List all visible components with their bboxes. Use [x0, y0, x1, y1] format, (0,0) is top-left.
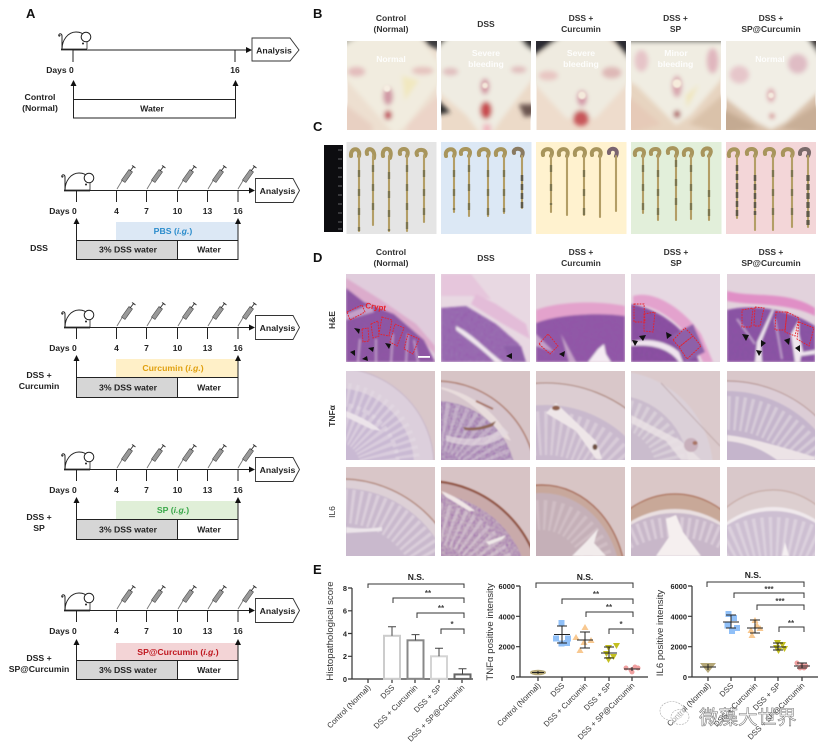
icon: mouse [62, 310, 94, 328]
day labels: 16 [233, 485, 243, 495]
analysis box: Analysis [260, 323, 296, 333]
TNFα image: DSS + SP@Curcumin [727, 371, 815, 460]
panel label B: B [313, 6, 322, 21]
significance brackets: ** [606, 603, 613, 612]
category labels: DSS [718, 681, 735, 699]
axes and ticks [343, 584, 473, 684]
category labels: DSS + Curcumin [372, 683, 419, 731]
watermark [660, 702, 797, 729]
day labels: 10 [173, 206, 182, 216]
axes and ticks: 6000 [499, 582, 515, 591]
analysis box [256, 458, 300, 482]
row label IL6: IL6 [327, 506, 337, 518]
photo caption: Normal [376, 54, 406, 64]
icon: wechat bubbles [660, 702, 689, 724]
icon: mouse [62, 452, 94, 470]
significance brackets: ** [425, 589, 432, 598]
day labels: 13 [203, 626, 212, 636]
analysis box: Analysis [256, 46, 292, 56]
day labels: 10 [173, 485, 182, 495]
day labels: 16 [233, 206, 243, 216]
group label: SP [33, 523, 45, 533]
significance brackets [368, 572, 464, 634]
treatment bar: PBS (i.g.) [154, 226, 192, 236]
significance brackets: N.S. [745, 570, 761, 580]
photo caption: curcumin bleeding: bleeding [563, 59, 599, 69]
treatment bar [116, 222, 238, 240]
water boxes: Water [197, 524, 222, 534]
category labels: DSS + SP [412, 683, 443, 714]
group label: DSS + [26, 370, 52, 380]
significance brackets: ** [788, 619, 795, 628]
day labels: Days 0 [49, 626, 77, 636]
analysis box [256, 598, 300, 622]
group label: SP@Curcumin [9, 664, 69, 674]
IL6 image: DSS [441, 467, 530, 556]
colon photo: DSS + Curcumin [536, 142, 626, 234]
column headings D [374, 247, 801, 268]
treatment bar: SP@Curcumin (i.g.) [137, 647, 219, 657]
water boxes: Water [197, 382, 222, 392]
day labels: 16 [230, 65, 240, 75]
category labels: DSS [549, 681, 566, 699]
water boxes: Water [197, 244, 222, 254]
syringes [117, 302, 256, 326]
photo caption: Severe [567, 48, 595, 58]
H&E image: control [346, 274, 435, 362]
icon: mouse [62, 173, 94, 190]
group label [22, 92, 58, 113]
significance brackets: *** [764, 585, 775, 594]
column headings D: DSS + [759, 247, 783, 257]
data points [700, 611, 810, 673]
group label [9, 653, 69, 674]
day labels: 7 [144, 206, 149, 216]
panel label D: D [313, 250, 322, 265]
column headings D: SP@Curcumin [741, 258, 801, 268]
axis arrow [76, 324, 255, 339]
analysis box [256, 178, 300, 202]
syringes [117, 586, 256, 609]
treatment bar: SP (i.g.) [157, 505, 189, 515]
category labels: DSS + SP@Curcumin [746, 681, 806, 742]
treatment bar [116, 643, 238, 660]
column headings D: DSS [477, 253, 495, 263]
bars [384, 627, 470, 679]
photo: DSS mouse [441, 41, 531, 130]
day labels [46, 65, 240, 75]
axes and ticks: 0 [343, 675, 347, 684]
colon photo: DSS + SP [631, 142, 722, 234]
day labels [49, 206, 243, 216]
category labels [665, 681, 806, 742]
chart: histopathological score [325, 572, 473, 744]
day labels: 4 [114, 343, 119, 353]
group label [19, 370, 59, 391]
H&E image: DSS + SP [631, 274, 720, 362]
group label: (Normal) [22, 103, 58, 113]
day labels: Days 0 [49, 343, 77, 353]
day labels: 7 [144, 485, 149, 495]
category labels: DSS + SP@Curcumin [406, 683, 466, 744]
analysis box: Analysis [260, 186, 296, 196]
axes and ticks [671, 582, 818, 682]
H&E image: DSS + SP@Curcumin [727, 274, 815, 362]
axis arrow [76, 188, 255, 202]
category labels: Control (Normal) [665, 681, 713, 728]
icon: mouse [59, 32, 91, 50]
IL6 image: DSS + Curcumin [536, 467, 625, 556]
analysis box: Analysis [260, 465, 296, 475]
day labels: 13 [203, 343, 212, 353]
ruler [324, 145, 343, 232]
photo caption: DSS bleeding: bleeding [468, 59, 504, 69]
significance brackets: *** [775, 597, 786, 606]
y axis title: TNFα positive intensity [485, 583, 496, 681]
axes and ticks: 0 [683, 673, 687, 682]
significance brackets: N.S. [577, 572, 593, 582]
syringes [117, 444, 256, 468]
column headings D: Curcumin [561, 258, 601, 268]
category labels: DSS + SP [582, 681, 613, 712]
axes and ticks: 2000 [499, 643, 515, 652]
column headings B: DSS [477, 19, 495, 29]
colon photo: DSS [441, 142, 532, 234]
water boxes: 3% DSS water [99, 244, 158, 254]
column headings D: DSS + [569, 247, 593, 257]
y axis title: IL6 positive intensity [655, 590, 666, 676]
row label TNFα: TNFα [327, 404, 337, 427]
category labels: DSS [379, 683, 396, 701]
day labels: 4 [114, 485, 119, 495]
column headings D: DSS + [664, 247, 688, 257]
y axis title: Histopathological score [325, 581, 336, 681]
axes and ticks: 6 [343, 606, 347, 616]
chart: TNFα positive intensity [485, 572, 648, 742]
analysis box [252, 38, 299, 61]
column headings B [374, 13, 801, 34]
day labels: Days 0 [46, 65, 74, 75]
watermark text: 微藻大世界 [699, 707, 797, 729]
day labels: 10 [173, 626, 182, 636]
H&E image: DSS + Curcumin [536, 274, 625, 362]
label: crypt: Crypt [365, 301, 387, 313]
panel label A: A [26, 6, 36, 21]
water boxes [74, 497, 241, 540]
axis arrow [76, 608, 255, 622]
category labels [495, 681, 636, 742]
panel label E: E [313, 562, 322, 577]
significance brackets: * [450, 620, 454, 629]
category labels: DSS + SP@Curcumin [576, 681, 636, 742]
day labels [49, 343, 243, 353]
water boxes: 3% DSS water [99, 382, 158, 392]
treatment bar [116, 359, 238, 377]
day labels [49, 485, 243, 495]
column headings B: Curcumin [561, 24, 601, 34]
photo caption: Minor [664, 48, 688, 58]
axes and ticks: 4000 [671, 612, 687, 621]
IL6 image: DSS + SP [631, 467, 720, 556]
day labels: 13 [203, 206, 212, 216]
colon photo: control [346, 142, 436, 234]
treatment bar [116, 501, 238, 519]
category labels: DSS + Curcumin [542, 681, 589, 729]
photo: control mouse [347, 41, 437, 130]
group label [26, 512, 52, 533]
IL6 image: control [346, 467, 435, 556]
photo caption: Severe [472, 48, 500, 58]
chart: IL6 positive intensity [655, 570, 818, 742]
photo caption: Normal [755, 54, 785, 64]
day labels: Days 0 [49, 485, 77, 495]
group label: DSS [30, 243, 48, 253]
water boxes [74, 639, 241, 680]
group label: DSS + [26, 512, 52, 522]
axes and ticks: 0 [511, 673, 515, 682]
day labels: 13 [203, 485, 212, 495]
water boxes [74, 218, 241, 260]
day labels: Days 0 [49, 206, 77, 216]
column headings D: Control [376, 247, 406, 257]
axes and ticks: 8 [343, 584, 347, 593]
column headings D: SP [670, 258, 682, 268]
photo: DSS + SP mouse [631, 41, 721, 130]
significance brackets [707, 570, 804, 632]
axis arrow [73, 47, 252, 62]
photo: DSS + Curcumin mouse [536, 41, 626, 130]
timeline: DSS group [30, 166, 300, 260]
column headings B: SP@Curcumin [741, 24, 801, 34]
scale bar [418, 356, 430, 358]
category labels: Control (Normal) [495, 681, 543, 728]
H&E image: DSS [441, 274, 530, 362]
TNFα image: control [346, 371, 435, 460]
axes and ticks [499, 582, 648, 682]
day labels: 7 [144, 626, 149, 636]
column headings B: DSS + [569, 13, 593, 23]
water box: Water [140, 104, 165, 114]
axes and ticks: 6000 [671, 582, 687, 591]
day labels: 16 [233, 343, 243, 353]
day labels: 7 [144, 343, 149, 353]
axes and ticks: 2000 [671, 643, 687, 652]
day labels: 4 [114, 626, 119, 636]
column headings B: Control [376, 13, 406, 23]
category labels [325, 683, 466, 744]
day labels: 10 [173, 343, 182, 353]
photo: DSS + SP@Curcumin mouse [726, 41, 816, 130]
treatment bar: Curcumin (i.g.) [142, 363, 204, 373]
syringes [117, 166, 256, 189]
group label: Curcumin [19, 381, 59, 391]
column headings B: SP [670, 24, 681, 34]
arrows [350, 328, 391, 361]
significance brackets [536, 572, 633, 634]
timeline: DSS + Curcumin group [19, 302, 300, 398]
colon photo: DSS + SP@Curcumin [726, 142, 816, 234]
day labels: 4 [114, 206, 119, 216]
water boxes [74, 355, 241, 398]
timeline: DSS + SP@Curcumin group [9, 586, 300, 680]
axes and ticks: 4 [343, 630, 348, 638]
row label H&E: H&E [327, 311, 337, 329]
panel label C: C [313, 119, 323, 134]
arrows [632, 332, 672, 346]
icon: mouse [62, 593, 94, 610]
category labels: Control (Normal) [325, 683, 373, 730]
column headings B: (Normal) [374, 24, 409, 34]
timeline: DSS + SP group [26, 444, 300, 540]
water boxes: Water [197, 665, 222, 675]
group label: Control [25, 92, 55, 102]
TNFα image: DSS + SP [631, 371, 720, 460]
category labels: DSS + Curcumin [712, 681, 759, 729]
TNFα image: DSS + Curcumin [536, 371, 625, 460]
significance brackets: * [619, 620, 623, 629]
day labels [49, 626, 243, 636]
axes and ticks: 4000 [499, 612, 515, 621]
analysis box [256, 316, 300, 340]
column headings B: DSS + [759, 13, 783, 23]
axis arrow [76, 466, 255, 481]
photo caption: SP bleeding: bleeding [658, 59, 693, 69]
analysis box: Analysis [260, 606, 296, 616]
water box [70, 80, 238, 118]
significance brackets: ** [593, 590, 600, 599]
TNFα image: DSS [441, 371, 530, 460]
arrow [559, 351, 565, 357]
axes and ticks: 2 [343, 652, 347, 661]
data points [530, 620, 640, 675]
water boxes: 3% DSS water [99, 524, 158, 534]
significance brackets: N.S. [408, 572, 424, 582]
significance brackets: ** [438, 604, 445, 613]
category labels: DSS + SP [751, 681, 782, 712]
group label: DSS + [26, 653, 52, 663]
day labels: 16 [233, 626, 243, 636]
IL6 image: DSS + SP@Curcumin [727, 467, 815, 556]
water boxes: 3% DSS water [99, 665, 158, 675]
arrows [742, 334, 800, 356]
timeline: control group [22, 32, 299, 118]
column headings D: (Normal) [374, 258, 409, 268]
column headings B: DSS + [663, 13, 688, 23]
